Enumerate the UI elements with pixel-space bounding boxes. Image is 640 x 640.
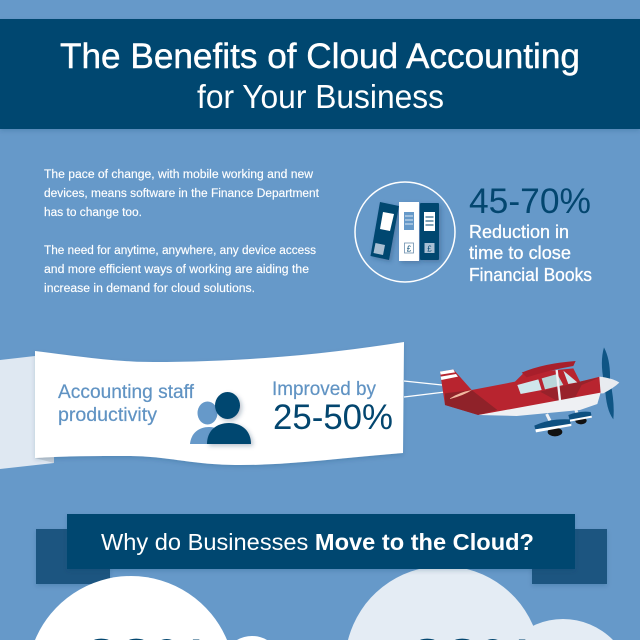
icon: people [190,392,251,444]
stat: 45-70% reduction: Financial Books [469,265,592,285]
banner stat: 25-50% [273,398,393,437]
banner stat [272,378,393,437]
tow lines [404,381,445,397]
banner ribbon [35,342,404,465]
intro text block: devices, means software in the Finance Department [44,188,320,200]
right cloud [348,566,613,640]
tail stripes [440,369,458,380]
title banner [0,19,640,129]
intro text block: increase in demand for cloud solutions. [44,283,255,295]
nose [599,377,619,393]
belly [478,393,601,416]
banner stat: Improved by [272,378,376,400]
stat: 45-70% reduction: Reduction in [469,222,569,242]
stat: 45-70% reduction: time to close [469,243,571,263]
plane banner [0,342,404,469]
section heading ribbon [36,529,607,584]
banner label: productivity [58,405,157,426]
icon: white binder: £ [407,244,412,254]
intro text block [44,169,320,295]
title line 1: The Benefits of Cloud Accounting [60,37,580,76]
windows [517,379,542,394]
landing gear [534,409,592,436]
stat: 45-70% reduction: 45-70% [469,182,591,221]
intro text block: has to change too. [44,207,142,219]
banner label: Accounting staff [58,382,195,403]
intro text block: The pace of change, with mobile working and new [44,169,314,181]
icon: plane [440,347,619,436]
section heading bar [67,514,575,569]
tail flash [450,390,472,399]
left cloud [35,576,267,640]
wing strut [557,370,561,407]
intro text block: The need for anytime, anywhere, any device access [44,245,316,257]
ribbon left tail [36,529,110,584]
propeller [602,347,614,419]
intro text block: and more efficient ways of working are aiding the [44,264,309,276]
stat: 45-70% reduction [469,182,592,285]
ribbon right tail [532,529,607,584]
wing [522,361,576,377]
banner label [58,382,195,426]
icon: binders in circle [355,182,455,282]
icon: right binder: £ [427,244,432,254]
banner tail fold [0,356,54,469]
section heading text: Why do Businesses Move to the Cloud? [101,529,534,555]
title line 2: for Your Business [197,78,444,115]
fuselage [440,368,601,415]
icon: tilted binder [370,202,399,260]
